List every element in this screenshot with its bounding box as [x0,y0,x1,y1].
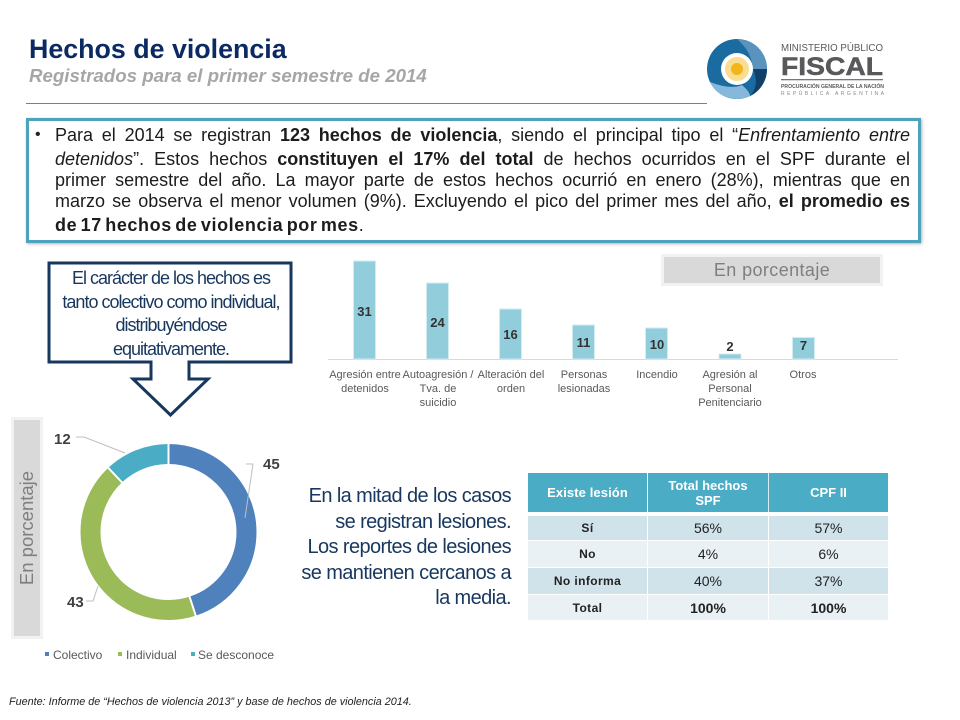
bar chart [328,260,898,409]
callout text: equitativamente. [113,338,229,358]
callout text: distribuyéndose [115,315,227,335]
bar chart: lesionadas [558,383,611,395]
table rows: 40% [694,573,722,589]
lesions text: Los reportes de lesiones [307,536,511,558]
label: en porcentaje (bars) [661,254,883,286]
callout arrow [48,262,292,418]
bar chart: 16 [503,327,518,342]
donut legend: Individual [126,648,177,662]
donut legend: Colectivo [53,648,103,662]
summary paragraph: • [35,126,41,143]
logo [707,39,885,99]
table rows: 6% [818,546,839,562]
lesions text [301,485,512,609]
table header: SPF [695,492,721,508]
table rows: Sí [581,521,594,535]
table rows: No informa [554,574,621,588]
bar chart: 11 [577,335,590,350]
table rows: No [579,547,596,561]
bar chart: suicidio [420,397,456,409]
bar chart: 7 [800,338,807,353]
donut chart: 43 [67,594,84,611]
table rows: 56% [694,520,722,536]
table rows: 100% [811,600,846,616]
table header [528,473,888,512]
icon: sun emblem [707,39,767,99]
table rows: 57% [814,520,843,536]
table: lesions [528,473,888,620]
bar chart: Penitenciario [698,397,762,409]
source note: Fuente: Informe de “Hechos de violencia 2013” y base de hechos de violencia 2014. [9,696,412,708]
callout text [62,268,280,359]
label: en porcentaje (donut) [11,417,43,639]
subtitle: Registrados para el primer semestre de 2014 [29,65,427,86]
title: Hechos de violencia [29,34,287,64]
lesions text: se registran lesiones. [335,510,511,532]
lesions text: la media. [435,587,511,609]
summary paragraph [35,125,910,235]
bar chart: Tva. de [420,383,456,395]
table rows: 100% [690,600,726,616]
lesions text: En la mitad de los casos [309,485,511,507]
label: en porcentaje (donut): En porcentaje [16,471,37,585]
donut chart [45,431,280,662]
donut chart: 12 [54,431,71,448]
table rows: 37% [814,573,843,589]
bar chart: Agresión al [702,369,758,381]
logo wordmark: MINISTERIO PÚBLICO [781,41,883,54]
bar chart: Otros [790,369,817,381]
summary paragraph: detenidos”. Estos hechos constituyen el 17% del total de hechos ocurridos en el SPF durante el [55,149,910,169]
bar chart: detenidos [341,383,389,395]
bar chart: orden [497,383,525,395]
summary paragraph: primer semestre del año. La mayor parte de estos hechos ocurrió en enero (28%), mientras que en [55,170,910,190]
panel: summary text [26,118,921,243]
bar chart: Personal [708,383,752,395]
logo wordmark: FISCAL [781,53,883,81]
bar chart: 31 [357,304,372,319]
table header: Existe lesión [547,485,628,500]
donut legend [45,648,274,662]
logo wordmark [781,41,885,97]
bar chart: Personas [561,369,608,381]
table rows: 4% [698,546,718,562]
callout text: El carácter de los hechos es [72,268,270,288]
logo wordmark: REPÚBLICA ARGENTINA [781,90,885,97]
table rows: Total [573,600,602,614]
bar chart: 24 [430,315,445,330]
summary paragraph: de 17 hechos de violencia por mes. [55,215,364,235]
bar chart: 10 [650,337,664,352]
donut chart: 45 [263,456,280,473]
table header: CPF II [810,485,847,500]
lesions text: se mantienen cercanos a [301,562,511,584]
callout text: tanto colectivo como individual, [62,292,280,312]
header rule [26,103,707,104]
summary paragraph: marzo se observa el menor volumen (9%). Excluyendo el pico del primer mes del año, el promedio es [55,191,910,211]
bar chart: Autoagresión / [403,369,474,381]
bar chart: Alteración del [478,369,544,381]
table header: Total hechos [668,478,748,492]
table rows [528,516,888,620]
summary paragraph: Para el 2014 se registran 123 hechos de violencia, siendo el principal tipo el “Enfrentamiento entre [55,125,910,145]
label: en porcentaje (bars): En porcentaje [714,260,830,280]
bar chart: Agresión entre [329,369,401,381]
bar chart: 2 [726,339,734,354]
donut legend: Se desconoce [198,648,274,662]
logo wordmark: PROCURACIÓN GENERAL DE LA NACIÓN [781,82,884,90]
bar chart: Incendio [636,369,678,381]
